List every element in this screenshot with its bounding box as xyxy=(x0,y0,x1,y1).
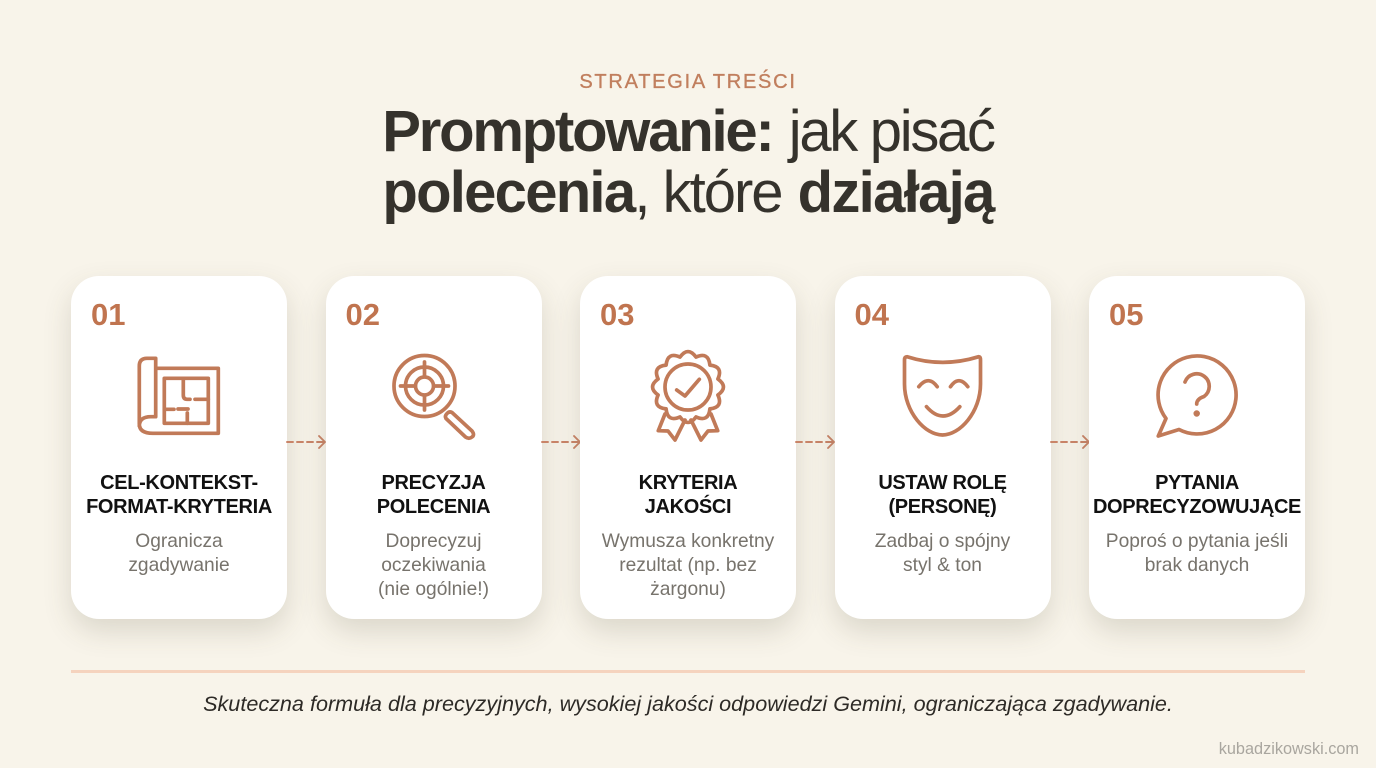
title xyxy=(382,99,996,225)
heading xyxy=(639,472,738,518)
divider line xyxy=(71,670,1305,673)
title: polecenia, które działają xyxy=(382,160,994,225)
panel: step 03 xyxy=(580,276,796,619)
description xyxy=(378,531,489,600)
step number 02: 02 xyxy=(346,297,380,332)
step number 03: 03 xyxy=(600,297,634,332)
heading: PYTANIA xyxy=(1155,472,1239,494)
panel: step 05 xyxy=(1089,276,1305,619)
panel: step 02 xyxy=(326,276,542,619)
heading: USTAW ROLĘ xyxy=(878,472,1007,494)
description: Zadbaj o spójny xyxy=(875,531,1010,552)
footer statement: Skuteczna formuła dla precyzyjnych, wysokiej jakości odpowiedzi Gemini, ograniczająca zgadywanie. xyxy=(203,691,1173,716)
description: Doprecyzuj xyxy=(386,531,481,552)
eyebrow label: STRATEGIA TREŚCI xyxy=(579,71,797,93)
credit: kubadzikowski.com xyxy=(1219,740,1359,758)
icon: theatre mask xyxy=(902,354,982,437)
heading: CEL-KONTEKST- xyxy=(100,472,258,494)
heading: POLECENIA xyxy=(377,496,490,518)
description: Wymusza konkretny xyxy=(602,531,774,552)
description: Poproś o pytania jeśli xyxy=(1106,531,1288,552)
description: żargonu) xyxy=(650,579,726,600)
heading: PRECYZJA xyxy=(382,472,485,494)
description: zgadywanie xyxy=(128,555,230,576)
heading: KRYTERIA xyxy=(639,472,737,494)
icon: rosette with checkmark xyxy=(650,350,726,442)
heading: FORMAT-KRYTERIA xyxy=(86,496,272,518)
arrow 3 to 4 xyxy=(795,435,835,449)
description: Ogranicza xyxy=(135,531,223,552)
icon: speech bubble with question mark xyxy=(1156,354,1238,438)
description: rezultat (np. bez xyxy=(619,555,757,576)
heading: JAKOŚCI xyxy=(645,496,731,518)
heading: (PERSONĘ) xyxy=(888,496,996,518)
heading xyxy=(1093,472,1301,518)
step number 05: 05 xyxy=(1109,297,1143,332)
arrow 4 to 5 xyxy=(1050,435,1089,449)
panel: step 04 xyxy=(834,276,1050,619)
description xyxy=(128,531,230,576)
description: styl & ton xyxy=(903,555,982,576)
heading xyxy=(86,472,272,518)
description xyxy=(875,531,1010,576)
description: brak danych xyxy=(1145,555,1249,576)
description xyxy=(602,531,774,600)
panel: step 01 xyxy=(71,276,287,619)
step number 04: 04 xyxy=(854,297,889,332)
title: Promptowanie: jak pisać xyxy=(382,99,994,164)
heading xyxy=(878,472,1007,518)
heading xyxy=(377,472,490,518)
icon: magnifier with target xyxy=(392,354,476,440)
description xyxy=(1106,531,1288,576)
arrow 2 to 3 xyxy=(541,435,580,449)
step number 01: 01 xyxy=(91,297,125,332)
icon: blueprint xyxy=(137,356,220,436)
description: (nie ogólnie!) xyxy=(378,579,489,600)
heading: DOPRECYZOWUJĄCE xyxy=(1093,496,1301,518)
arrow 1 to 2 xyxy=(286,435,326,449)
description: oczekiwania xyxy=(381,555,486,576)
